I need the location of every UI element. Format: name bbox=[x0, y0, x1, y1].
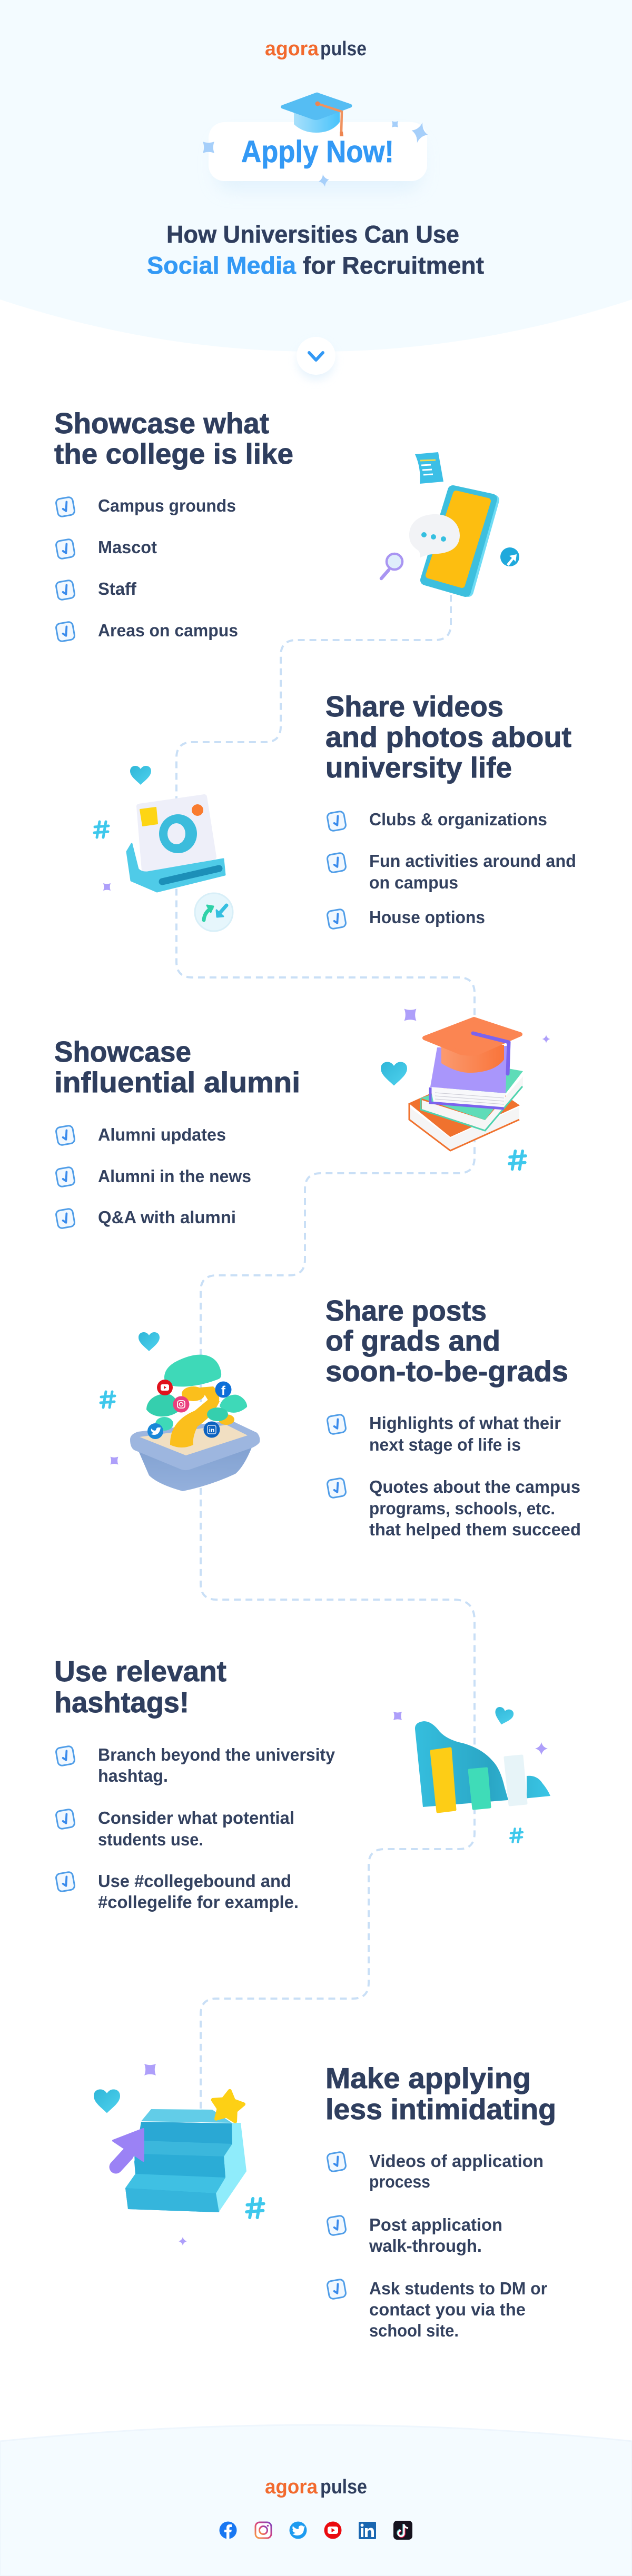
dashed connector path bbox=[176, 595, 475, 2111]
checklist: next stage of life is bbox=[369, 1435, 521, 1454]
checklist: Alumni in the news bbox=[98, 1166, 251, 1186]
social icons row bbox=[219, 2521, 412, 2540]
icon: hashtag bbox=[509, 1151, 526, 1169]
checklist: Videos of application bbox=[369, 2151, 544, 2171]
heading: and photos about bbox=[325, 721, 571, 753]
heading: university life bbox=[325, 751, 512, 784]
checklist: Alumni updates bbox=[98, 1125, 226, 1144]
yellow bar bbox=[431, 1749, 455, 1812]
heading: Share videos bbox=[325, 690, 503, 723]
sparkle bbox=[144, 2064, 156, 2075]
title bbox=[147, 221, 484, 279]
pot bbox=[130, 1421, 260, 1491]
checklist: Use #collegebound and bbox=[98, 1871, 291, 1891]
checklist: walk-through. bbox=[369, 2236, 482, 2255]
sparkle bbox=[393, 1712, 402, 1720]
panel: share videos and photos bbox=[325, 690, 576, 930]
small sparkle bbox=[542, 1035, 550, 1043]
icon: hashtag bbox=[101, 1392, 115, 1407]
checklist: hashtag. bbox=[98, 1766, 168, 1785]
checklist: Consider what potential bbox=[98, 1808, 294, 1828]
social icon balls: in bbox=[209, 1426, 214, 1434]
header: logo: agora bbox=[265, 38, 319, 60]
heading: of grads and bbox=[325, 1324, 500, 1357]
foliage bbox=[146, 1355, 247, 1431]
illustration: bar chart bbox=[393, 1706, 550, 1842]
icon: heart bbox=[492, 1706, 515, 1727]
heading: the college is like bbox=[54, 437, 293, 470]
arrow bbox=[113, 2129, 143, 2167]
icon: tiktok bbox=[393, 2521, 412, 2540]
white bar bbox=[505, 1756, 526, 1805]
illustration: instant camera bbox=[94, 766, 233, 931]
bottom orange book bbox=[409, 1074, 520, 1151]
checklist: House options bbox=[369, 907, 485, 927]
sparkles around button bbox=[203, 121, 431, 188]
heading: Use relevant bbox=[54, 1655, 226, 1688]
icon: hashtag bbox=[246, 2199, 264, 2218]
icon: youtube bbox=[324, 2521, 341, 2539]
illustration: bonsai tree with social icons bbox=[101, 1332, 260, 1491]
checklist: Mascot bbox=[98, 537, 157, 557]
sparkles bbox=[404, 1009, 416, 1021]
icon: heart bbox=[94, 2090, 120, 2113]
apply now button: Apply Now! bbox=[241, 135, 394, 169]
illustration: stairs with star and arrow bbox=[94, 2064, 264, 2245]
star bbox=[210, 2089, 245, 2122]
panel: showcase what the college is like bbox=[54, 407, 293, 642]
icon: heart bbox=[381, 1062, 407, 1085]
checklist: school site. bbox=[369, 2321, 459, 2340]
title: Social Media bbox=[147, 252, 296, 279]
checklist: Clubs & organizations bbox=[369, 810, 547, 829]
title: for Recruitment bbox=[303, 252, 484, 279]
heading: influential alumni bbox=[54, 1066, 300, 1099]
green bar bbox=[469, 1769, 490, 1809]
checklist: contact you via the bbox=[369, 2300, 526, 2319]
checklist bbox=[327, 2151, 547, 2340]
heading: soon-to-be-grads bbox=[325, 1355, 568, 1387]
heading bbox=[325, 1294, 568, 1387]
heading bbox=[54, 1655, 226, 1719]
middle green book bbox=[421, 1069, 523, 1131]
checklist: Branch beyond the university bbox=[98, 1745, 335, 1764]
checklist: on campus bbox=[369, 873, 458, 892]
checklist bbox=[55, 1125, 251, 1229]
checklist bbox=[327, 1413, 581, 1539]
checklist: Quotes about the campus bbox=[369, 1477, 580, 1496]
header: logo: pulse bbox=[320, 38, 367, 60]
checklist: process bbox=[369, 2172, 430, 2191]
title: How Universities Can Use bbox=[166, 221, 459, 248]
icon: heart bbox=[139, 1332, 160, 1351]
header: logo bbox=[265, 38, 367, 60]
checklist: Staff bbox=[98, 579, 137, 598]
top purple book bbox=[430, 1046, 507, 1109]
icon: twitter bbox=[290, 2521, 307, 2539]
heading: less intimidating bbox=[325, 2093, 556, 2125]
checklist: Post application bbox=[369, 2215, 502, 2234]
trunk bbox=[170, 1386, 234, 1447]
icon: chevron down bbox=[297, 337, 335, 380]
checklist bbox=[327, 810, 576, 930]
icon: heart bbox=[130, 766, 151, 785]
small sparkle bbox=[179, 2237, 187, 2245]
icon: linkedin bbox=[359, 2522, 376, 2539]
header background bbox=[0, 0, 632, 352]
icon: magnifier bbox=[381, 554, 402, 578]
icon: document bbox=[415, 452, 443, 484]
panel: share posts of grads bbox=[325, 1294, 581, 1539]
checklist: programs, schools, etc. bbox=[369, 1499, 555, 1518]
footer logo: agora bbox=[265, 2476, 318, 2498]
stairs bbox=[125, 2109, 246, 2212]
panel: showcase influential alumni bbox=[54, 1035, 300, 1229]
checklist: #collegelife for example. bbox=[98, 1892, 299, 1912]
checklist bbox=[55, 1745, 335, 1912]
footer logo bbox=[265, 2476, 367, 2498]
panel: use relevant hashtags bbox=[54, 1655, 335, 1912]
small sparkle bbox=[535, 1742, 548, 1755]
social icon balls bbox=[147, 1380, 232, 1439]
checklist: students use. bbox=[98, 1830, 203, 1849]
icon: share arrow bbox=[500, 547, 519, 566]
checklist: Fun activities around and bbox=[369, 851, 576, 871]
illustration: books with graduation cap bbox=[381, 1009, 550, 1169]
heading bbox=[325, 2062, 556, 2125]
checklist: Areas on campus bbox=[98, 621, 238, 640]
icon: hashtag bbox=[510, 1829, 522, 1842]
checklist: that helped them succeed bbox=[369, 1520, 581, 1539]
apply now button bbox=[209, 122, 427, 191]
cap bbox=[424, 1019, 520, 1074]
panel: make applying less intimidating bbox=[325, 2062, 556, 2340]
icon: hashtag bbox=[94, 822, 108, 837]
heading bbox=[54, 407, 293, 470]
icon: graduation cap bbox=[281, 93, 352, 136]
heading: Share posts bbox=[325, 1294, 487, 1327]
checklist: Campus grounds bbox=[98, 496, 236, 515]
icon: repost bubble bbox=[195, 893, 233, 931]
heading: Make applying bbox=[325, 2062, 531, 2094]
footer background bbox=[0, 2425, 632, 2576]
checklist: Highlights of what their bbox=[369, 1413, 561, 1433]
heading bbox=[54, 1035, 300, 1099]
heading: Showcase what bbox=[54, 407, 269, 440]
checklist: Q&A with alumni bbox=[98, 1207, 236, 1227]
sparkle bbox=[103, 883, 111, 891]
social icon balls: f bbox=[221, 1384, 226, 1398]
heading: hashtags! bbox=[54, 1686, 189, 1719]
checklist: Ask students to DM or bbox=[369, 2279, 547, 2298]
footer logo: pulse bbox=[320, 2476, 367, 2498]
heading: Showcase bbox=[54, 1035, 191, 1068]
area shape bbox=[415, 1721, 550, 1807]
illustration: phone with chat bubble bbox=[381, 452, 519, 592]
sparkle bbox=[111, 1457, 118, 1464]
checklist bbox=[55, 496, 238, 642]
heading bbox=[325, 690, 571, 784]
icon: facebook bbox=[219, 2521, 237, 2539]
icon: instagram bbox=[255, 2522, 271, 2538]
